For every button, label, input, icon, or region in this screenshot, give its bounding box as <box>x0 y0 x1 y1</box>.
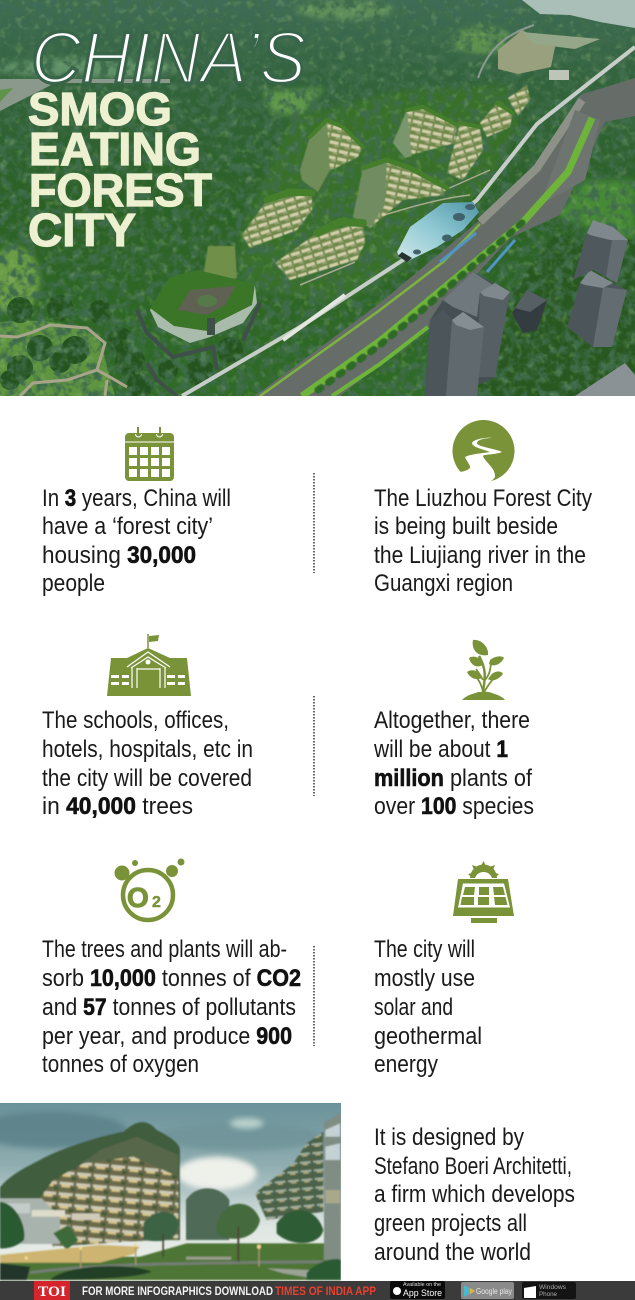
icon: oxygen O2 bubbles: 2 <box>152 894 161 911</box>
badge: App Store: App Store <box>403 1288 442 1299</box>
badge: Google Play <box>461 1282 514 1299</box>
icon: calendar <box>125 427 174 481</box>
text: designer <box>374 1124 575 1266</box>
text: river location: the Liujiang river in the <box>374 542 586 569</box>
text: designer: green projects all <box>374 1210 527 1237</box>
monorail <box>182 47 635 396</box>
text: river location: is being built beside <box>374 513 558 540</box>
text: absorption figures: sorb 10,000 tonnes of CO2 <box>42 965 301 992</box>
text: trees on buildings <box>42 707 253 820</box>
text: energy sources: energy <box>374 1051 438 1078</box>
footer message: TIMES OF INDIA APP <box>275 1284 376 1298</box>
text: plants count: million plants of <box>374 765 532 792</box>
title lines: Smog Eating Forest City: FOREST <box>29 164 212 216</box>
text: absorption figures: and 57 tonnes of pollutants <box>42 994 296 1021</box>
text: designer: It is designed by <box>374 1124 524 1151</box>
text: absorption figures: per year, and produce 900 <box>42 1023 292 1050</box>
text: river location: The Liuzhou Forest City <box>374 485 592 512</box>
station canopy <box>397 202 479 262</box>
text: energy sources: geothermal <box>374 1023 482 1050</box>
forest tree texture <box>0 0 635 396</box>
text: energy sources: solar and <box>374 994 453 1021</box>
icon: oxygen O2 bubbles: O <box>127 882 149 913</box>
road network <box>255 78 635 396</box>
main building foliage and balconies <box>0 1122 180 1240</box>
distant town <box>478 0 635 80</box>
text: trees on buildings: hotels, hospitals, etc in <box>42 736 253 763</box>
text: trees on buildings: the city will be covered <box>42 765 252 792</box>
text: designer: a firm which develops <box>374 1181 575 1208</box>
text: forest city housing: have a ‘forest city’ <box>42 513 213 540</box>
icon: school building <box>107 634 191 696</box>
text: absorption figures <box>42 936 301 1078</box>
TOI logo: TOI <box>38 1284 66 1300</box>
text: absorption figures: The trees and plants will ab- <box>42 936 287 963</box>
icon: river <box>452 420 514 486</box>
forest towers <box>202 85 530 283</box>
text: plants count: will be about 1 <box>373 736 508 763</box>
clearings and grass <box>0 0 635 396</box>
podium building <box>150 270 257 343</box>
text: trees on buildings: The schools, offices, <box>42 707 229 734</box>
park trees <box>0 295 243 398</box>
text: plants count <box>373 707 534 820</box>
text: absorption figures: tonnes of oxygen <box>42 1051 199 1078</box>
footer message: FOR MORE INFOGRAPHICS DOWNLOAD <box>82 1284 273 1298</box>
text: designer: Stefano Boeri Architetti, <box>374 1153 572 1180</box>
hero photo: aerial view of forest city <box>0 0 635 398</box>
icon: sapling plant <box>462 640 505 700</box>
text: energy sources: The city will <box>374 936 475 963</box>
icon: oxygen O2 bubbles <box>114 858 184 920</box>
title lines: Smog Eating Forest City <box>28 83 212 256</box>
grey residential towers <box>425 220 635 396</box>
text: plants count: Altogether, there <box>374 707 530 734</box>
text: trees on buildings: in 40,000 trees <box>42 793 193 820</box>
title lines: Smog Eating Forest City: EATING <box>29 123 201 175</box>
TOI logo <box>34 1281 70 1300</box>
icon: solar panel and sun <box>453 861 514 923</box>
left road <box>0 79 170 111</box>
park paths <box>0 325 127 396</box>
text: forest city housing: people <box>42 570 105 597</box>
badge: Windows Phone: Phone <box>539 1292 558 1298</box>
text: river location: Guangxi region <box>374 570 513 597</box>
badge: App Store: Available on the <box>403 1282 441 1288</box>
title line: China's: CHINA’S <box>31 18 306 99</box>
footer bar <box>0 1281 635 1300</box>
text: plants count: over 100 species <box>374 793 534 820</box>
badge: Google Play: Google play <box>476 1287 512 1296</box>
text: forest city housing: housing 30,000 <box>42 542 196 569</box>
title lines: Smog Eating Forest City: SMOG <box>28 83 172 135</box>
badge: Windows Phone <box>522 1282 576 1299</box>
title <box>28 18 306 256</box>
trees and lawn <box>0 1202 24 1248</box>
text: forest city housing <box>42 485 231 597</box>
text: energy sources: mostly use <box>374 965 475 992</box>
text: designer: around the world <box>374 1239 531 1266</box>
badge: Windows Phone: Windows <box>539 1285 566 1291</box>
text: energy sources <box>374 936 482 1078</box>
landscape around buildings <box>300 170 490 285</box>
badge: App Store <box>390 1281 445 1299</box>
rooftop foliage <box>267 103 513 233</box>
distant and right buildings <box>186 1188 229 1240</box>
text: river location <box>374 485 592 597</box>
text: forest city housing: In 3 years, China will <box>42 485 231 512</box>
lower photo: forest towers at dusk <box>0 1103 341 1281</box>
title lines: Smog Eating Forest City: CITY <box>28 204 136 256</box>
